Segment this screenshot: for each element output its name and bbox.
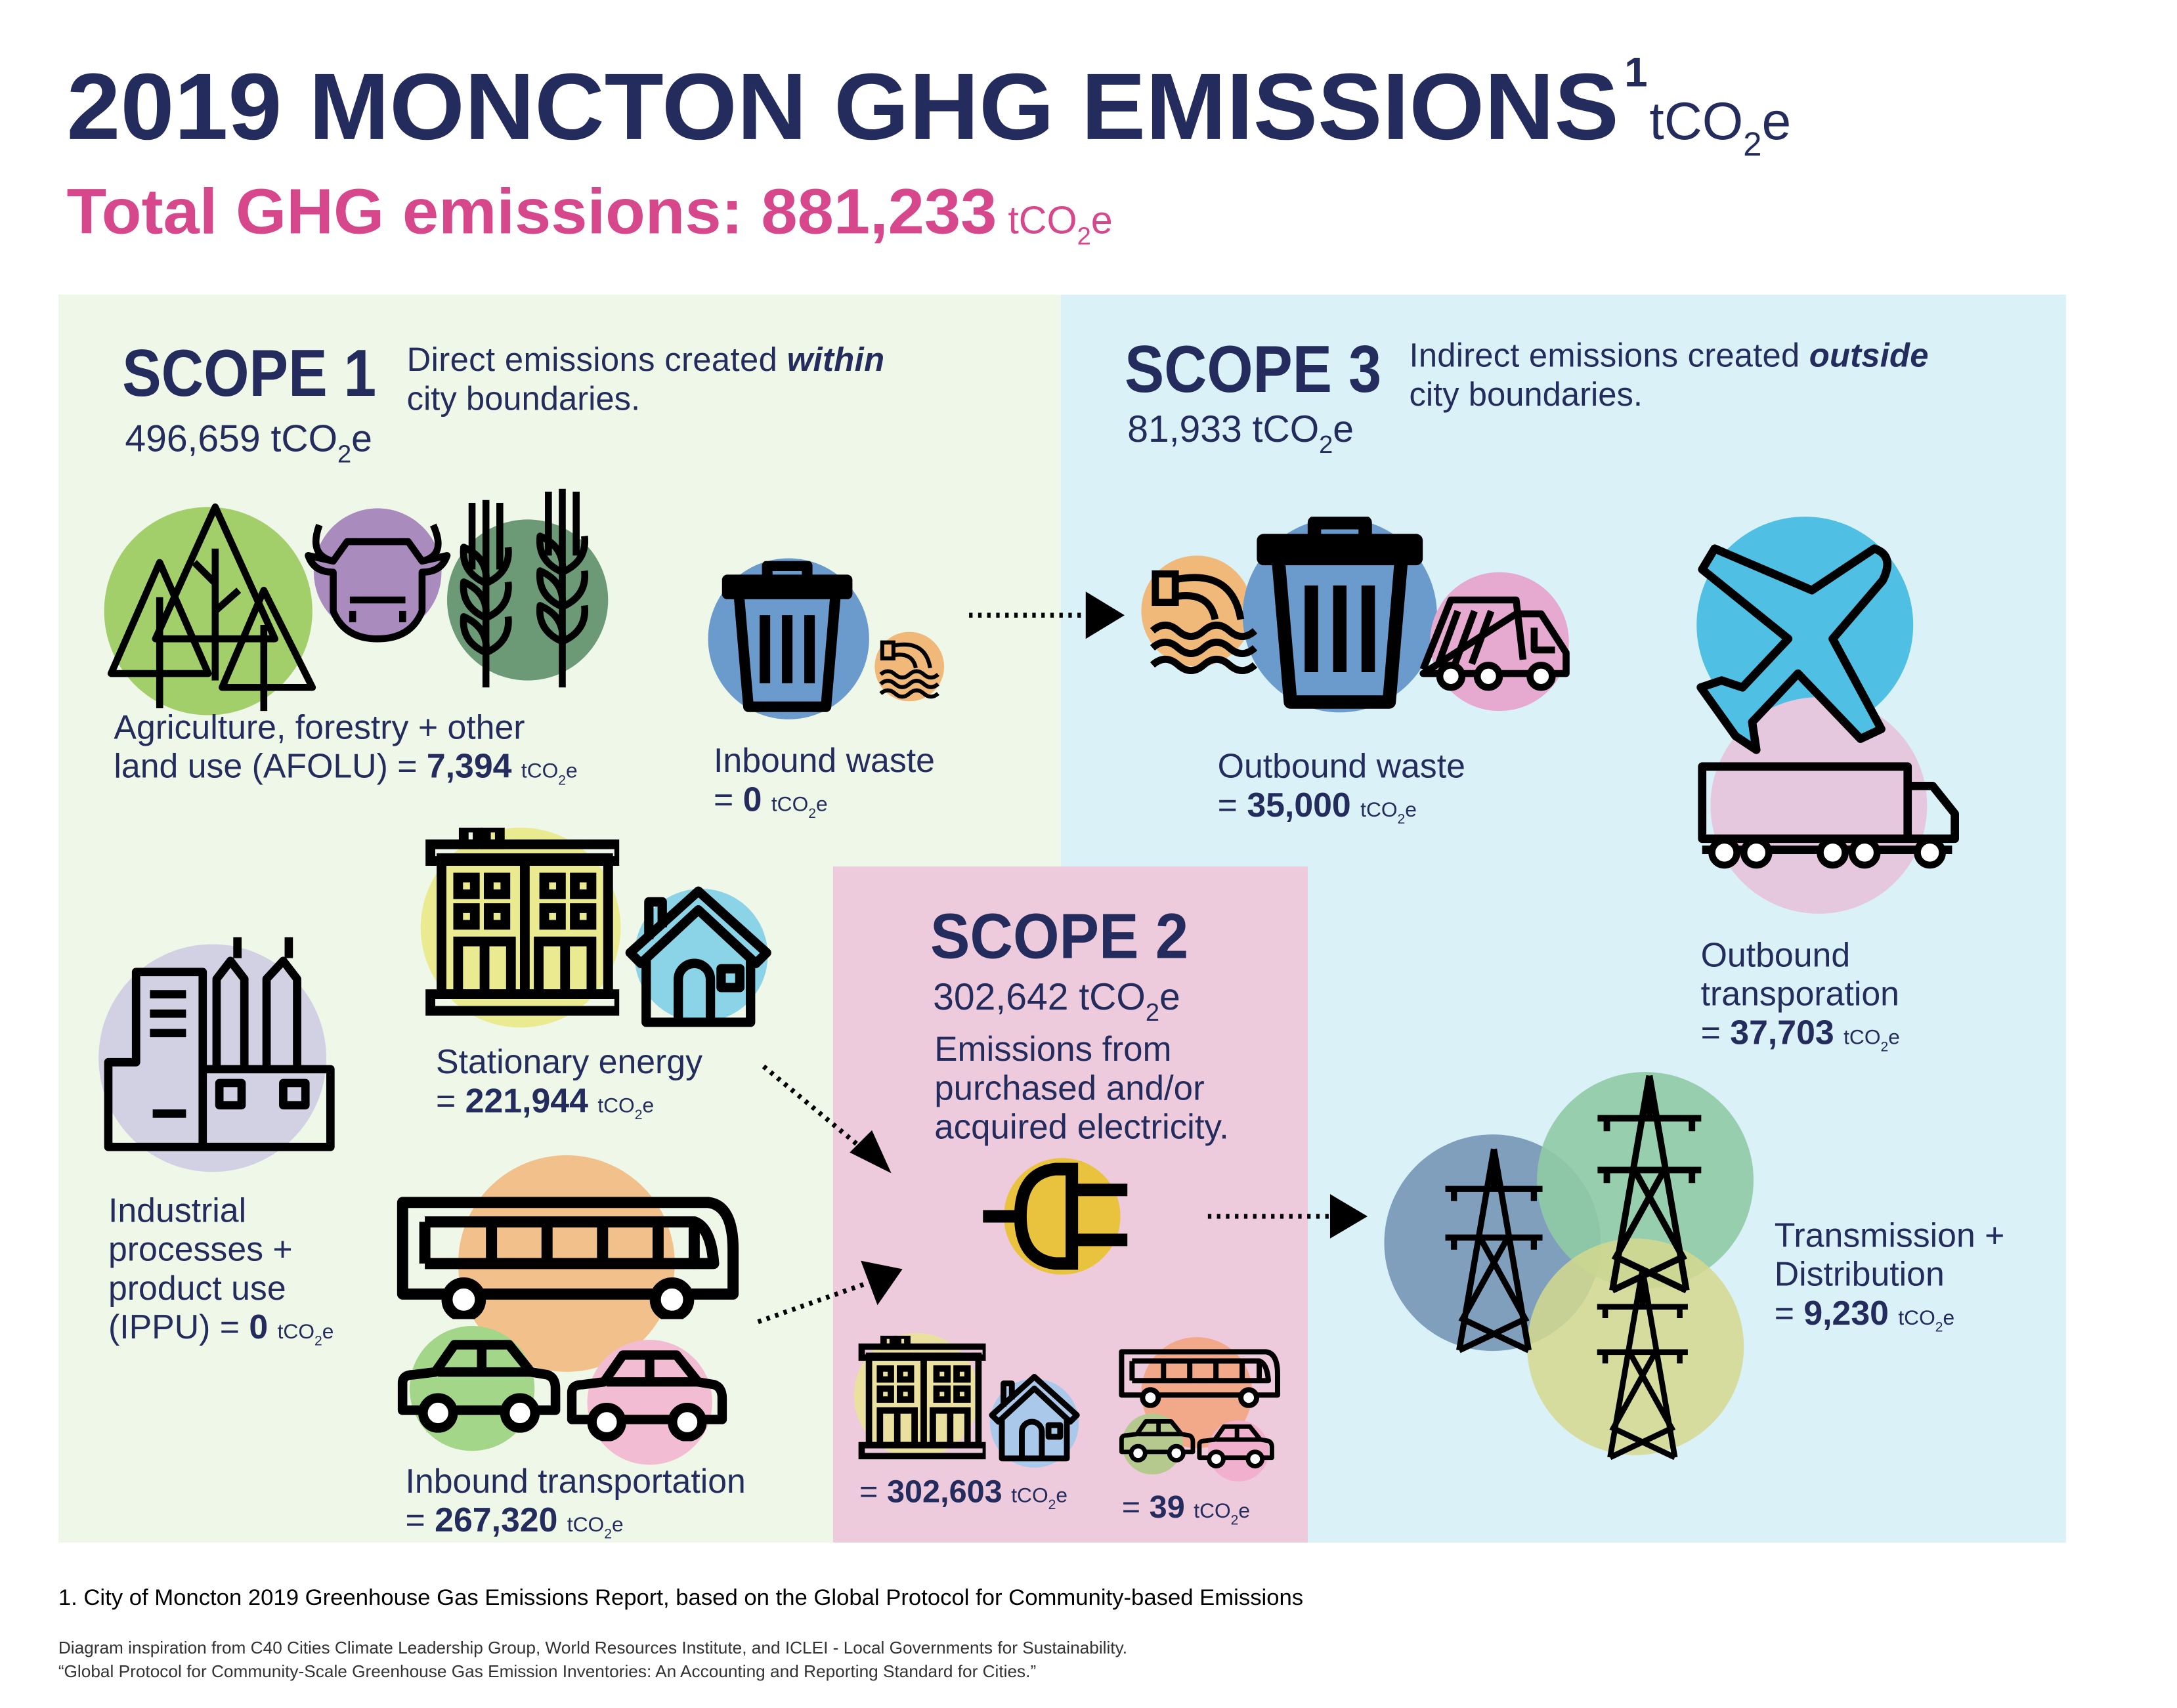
text: AFOLU: 2	[558, 773, 566, 788]
icon: industrial	[98, 937, 330, 1172]
text: inbound waste: = 0 tCO	[714, 780, 808, 818]
text: outbound waste: e	[1405, 798, 1417, 821]
text: transmission: 2	[1935, 1319, 1943, 1334]
text: inbound transportation: Inbound transportation	[406, 1462, 746, 1500]
text: scope 2 vehicles: e	[1238, 1499, 1250, 1522]
text: stationary energy: e	[642, 1093, 654, 1117]
icon: stationary energy	[421, 828, 767, 1027]
text: inbound transportation: e	[612, 1512, 624, 1536]
text: scope 2 buildings: 2	[1048, 1497, 1056, 1512]
text: stationary energy: 2	[635, 1107, 642, 1122]
subtitle: total: Total GHG emissions: 881,233	[67, 176, 997, 247]
text: outbound transportation: 2	[1881, 1039, 1888, 1054]
text: AFOLU: Agriculture, forestry + other	[114, 708, 525, 746]
arrow: inbound to outbound waste	[969, 591, 1125, 639]
arrow: stationary to scope 2	[764, 1067, 892, 1173]
text: industrial: e	[322, 1319, 334, 1343]
text: scope 2 buildings: = 302,603 tCO	[859, 1474, 1048, 1510]
scope 3 heading	[1125, 331, 1928, 459]
scope 3 heading: SCOPE 3	[1125, 331, 1381, 406]
title: 2	[1743, 125, 1761, 163]
arrow: transport to scope 2	[758, 1261, 903, 1322]
text: inbound waste: e	[816, 792, 828, 815]
icon: transmission towers	[1384, 1072, 1754, 1457]
text: scope 2 vehicles: = 39 tCO	[1122, 1489, 1231, 1525]
icon: AFOLU	[104, 489, 608, 715]
text: outbound waste: Outbound waste	[1218, 747, 1465, 785]
scope 2 heading	[930, 901, 1229, 1147]
text: outbound transportation: = 37,703 tCO	[1701, 1014, 1880, 1052]
scope 2 heading: SCOPE 2	[930, 901, 1188, 972]
scope 3 heading: 81,933 tCO	[1127, 408, 1319, 450]
scope 1 heading: e	[351, 418, 372, 460]
text: scope 2 vehicles: 2	[1231, 1512, 1238, 1527]
text: industrial: Industrial	[108, 1191, 246, 1229]
text: outbound waste: = 35,000 tCO	[1218, 786, 1398, 824]
text: transmission: Transmission +	[1775, 1216, 2004, 1254]
title: 1	[1624, 50, 1648, 96]
text: inbound waste	[714, 741, 935, 821]
subtitle: total: e	[1091, 198, 1113, 242]
text: industrial: product use	[108, 1269, 286, 1307]
text: outbound transportation: Outbound	[1701, 935, 1850, 973]
scope 1 heading: city boundaries.	[407, 379, 640, 417]
scope 2 heading: 302,642 tCO	[933, 976, 1146, 1018]
text: outbound transportation: transporation	[1701, 975, 1899, 1013]
text: transmission: e	[1943, 1306, 1954, 1329]
text: outbound waste	[1218, 747, 1465, 826]
scope 2 heading: e	[1159, 976, 1180, 1018]
icon: outbound waste	[1141, 518, 1569, 712]
panel: scope 2	[833, 866, 1308, 1543]
panel: scope 1	[58, 295, 1061, 1543]
icon: inbound waste	[708, 559, 944, 719]
icon: scope 2 buildings	[854, 1333, 1079, 1468]
scope 2 heading: Emissions from	[934, 1030, 1172, 1069]
footnote: 1. City of Moncton 2019 Greenhouse Gas Emissions Report, based on the Global Protocol for Community-based Emissions	[58, 1585, 1303, 1610]
text: AFOLU: land use (AFOLU) = 7,394 tCO	[114, 747, 558, 785]
text: outbound waste: 2	[1398, 811, 1405, 826]
text: scope 2 buildings: e	[1056, 1484, 1067, 1507]
subtitle: total: tCO	[1008, 198, 1077, 242]
text: stationary energy: Stationary energy	[436, 1042, 702, 1080]
credits: Diagram inspiration from C40 Cities Climate Leadership Group, World Resources Institute, and ICLEI - Local Governments for Sustainability.	[58, 1638, 1127, 1657]
scope 3 heading: Indirect emissions created outside	[1410, 337, 1928, 374]
scope 1 heading: Direct emissions created within	[407, 341, 884, 378]
text: industrial: processes +	[108, 1230, 293, 1268]
panel: scope 3	[1061, 295, 2066, 1543]
credits: “Global Protocol for Community-Scale Greenhouse Gas Emission Inventories: An Accounting and Reporting Standard for Cities.”	[58, 1661, 1036, 1681]
icon: plane and truck	[1696, 517, 1955, 914]
text: AFOLU	[114, 708, 578, 788]
text: inbound transportation: = 267,320 tCO	[406, 1501, 604, 1539]
scope 1 heading: 2	[337, 441, 351, 469]
text: outbound transportation	[1701, 935, 1900, 1054]
text: industrial: 2	[314, 1334, 322, 1349]
text: inbound waste: Inbound waste	[714, 741, 935, 779]
title: 2019 MONCTON GHG EMISSIONS	[67, 54, 1619, 160]
text: inbound transportation	[406, 1462, 746, 1542]
scope 2 heading: 2	[1146, 999, 1159, 1027]
scope 1 heading: 496,659 tCO	[125, 418, 337, 460]
text: transmission: Distribution	[1775, 1255, 1945, 1293]
text: stationary energy: = 221,944 tCO	[436, 1081, 635, 1119]
arrow: plug to transmission	[1208, 1194, 1368, 1239]
text: transmission	[1775, 1216, 2004, 1334]
title: e	[1761, 92, 1791, 151]
text: industrial	[108, 1191, 334, 1349]
scope 2 heading: acquired electricity.	[934, 1108, 1229, 1147]
scope 3 heading: 2	[1319, 431, 1333, 459]
text: outbound transportation: e	[1888, 1025, 1900, 1049]
scope 1 heading: SCOPE 1	[122, 335, 376, 410]
subtitle: total: 2	[1077, 223, 1091, 251]
scope 3 heading: city boundaries.	[1410, 375, 1643, 413]
text: transmission: = 9,230 tCO	[1775, 1294, 1935, 1332]
credits	[58, 1638, 1127, 1681]
icon: scope 2 vehicles	[1121, 1337, 1278, 1482]
text: industrial: (IPPU) = 0 tCO	[108, 1308, 314, 1346]
title: tCO	[1649, 92, 1743, 151]
scope 1 heading	[122, 335, 884, 469]
text: AFOLU: e	[566, 759, 578, 782]
icon: inbound transportation	[402, 1155, 733, 1465]
scope 2 heading: purchased and/or	[934, 1069, 1205, 1107]
text: inbound waste: 2	[808, 806, 816, 821]
scope 3 heading: e	[1333, 408, 1354, 450]
icon: plug	[983, 1158, 1127, 1275]
text: stationary energy	[436, 1042, 702, 1122]
text: inbound transportation: 2	[604, 1527, 612, 1542]
